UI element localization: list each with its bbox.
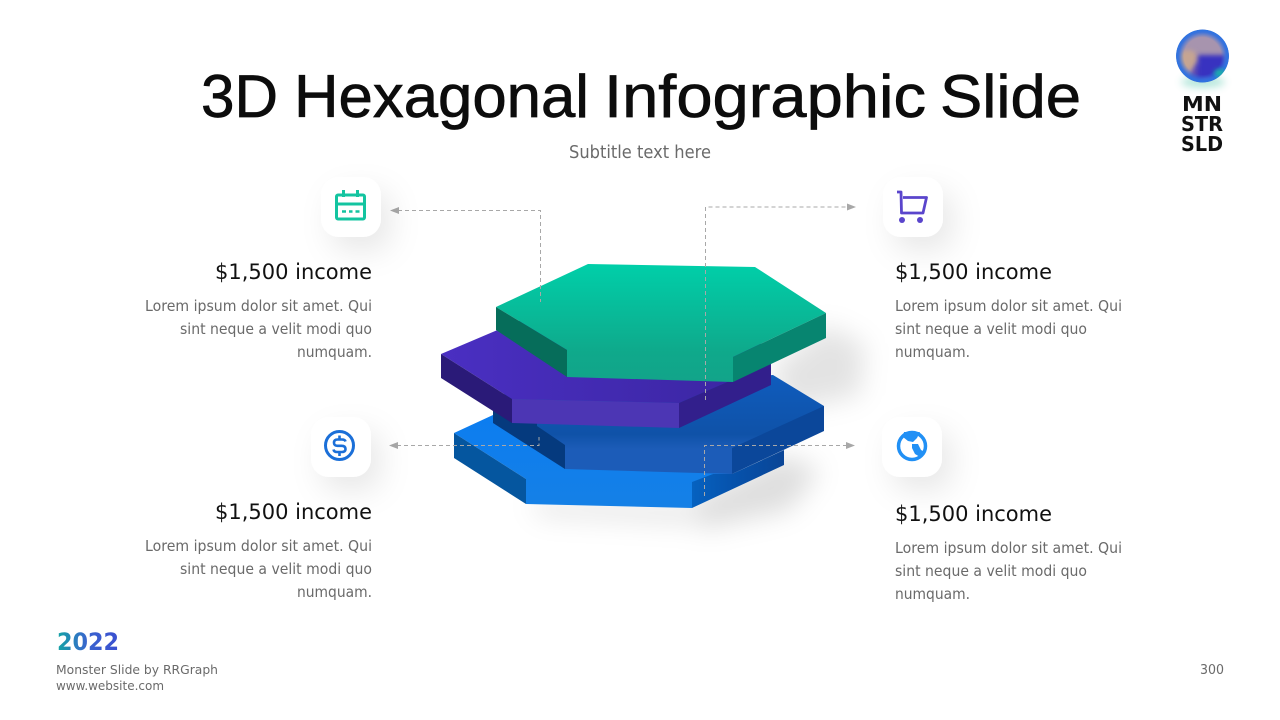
- hexagon layer: purple: [441, 315, 771, 428]
- body: numquam.: [297, 583, 372, 601]
- text block: top right: [895, 260, 1122, 361]
- connector: top right: [706, 204, 856, 400]
- body: Lorem ipsum dolor sit amet. Qui: [145, 297, 372, 315]
- body: numquam.: [895, 343, 970, 361]
- heading: $1,500 income: [215, 260, 372, 284]
- brand logo: [1176, 30, 1229, 156]
- text block: top left: [145, 260, 372, 361]
- body: sint neque a velit modi quo: [180, 320, 372, 338]
- hexagon layer: top green: [496, 264, 826, 382]
- heading: $1,500 income: [215, 500, 372, 524]
- title: Slide: [940, 63, 1081, 130]
- heading: $1,500 income: [895, 502, 1052, 526]
- body: sint neque a velit modi quo: [895, 320, 1087, 338]
- text block: bottom right: [895, 502, 1122, 603]
- icon: calendar: [336, 190, 364, 219]
- body: [145, 297, 372, 361]
- logo sphere: [1176, 30, 1229, 88]
- hexagon layer: dark blue: [493, 375, 824, 474]
- footer credits: [56, 662, 218, 693]
- footer credits: www.website.com: [56, 678, 164, 693]
- logo text: STR: [1181, 112, 1223, 136]
- icon: cart: [897, 192, 926, 223]
- subtitle: Subtitle text here: [569, 143, 711, 163]
- stacked 3D hexagon chart: [441, 264, 865, 530]
- footer credits: Monster Slide by RRGraph: [56, 662, 218, 677]
- icon: globe: [898, 432, 926, 460]
- title: Infographic: [604, 63, 926, 130]
- heading: $1,500 income: [895, 260, 1052, 284]
- title: 3D: [201, 63, 278, 130]
- layer shadows: [530, 325, 865, 530]
- body: Lorem ipsum dolor sit amet. Qui: [145, 537, 372, 555]
- icon: dollar coin: [326, 432, 354, 460]
- icon card: cart: [883, 177, 943, 237]
- logo text: MN: [1182, 92, 1222, 116]
- title: [201, 63, 1081, 130]
- icon card: dollar: [311, 417, 371, 477]
- icon card: calendar: [321, 177, 381, 237]
- text block: bottom left: [145, 500, 372, 601]
- body: numquam.: [895, 585, 970, 603]
- body: sint neque a velit modi quo: [180, 560, 372, 578]
- body: Lorem ipsum dolor sit amet. Qui: [895, 539, 1122, 557]
- body: [895, 539, 1122, 603]
- connector: top left: [390, 207, 540, 302]
- body: numquam.: [297, 343, 372, 361]
- connector: bottom right: [704, 442, 855, 496]
- page number: 300: [1200, 662, 1224, 678]
- title: Hexagonal: [294, 63, 589, 130]
- footer year: 2022: [57, 628, 119, 656]
- body: [895, 297, 1122, 361]
- body: Lorem ipsum dolor sit amet. Qui: [895, 297, 1122, 315]
- hexagon layer: bottom blue: [454, 415, 784, 508]
- connector: bottom left: [389, 437, 539, 449]
- logo text: [1181, 92, 1223, 156]
- body: sint neque a velit modi quo: [895, 562, 1087, 580]
- body: [145, 537, 372, 601]
- logo text: SLD: [1181, 132, 1223, 156]
- icon card: globe: [882, 417, 942, 477]
